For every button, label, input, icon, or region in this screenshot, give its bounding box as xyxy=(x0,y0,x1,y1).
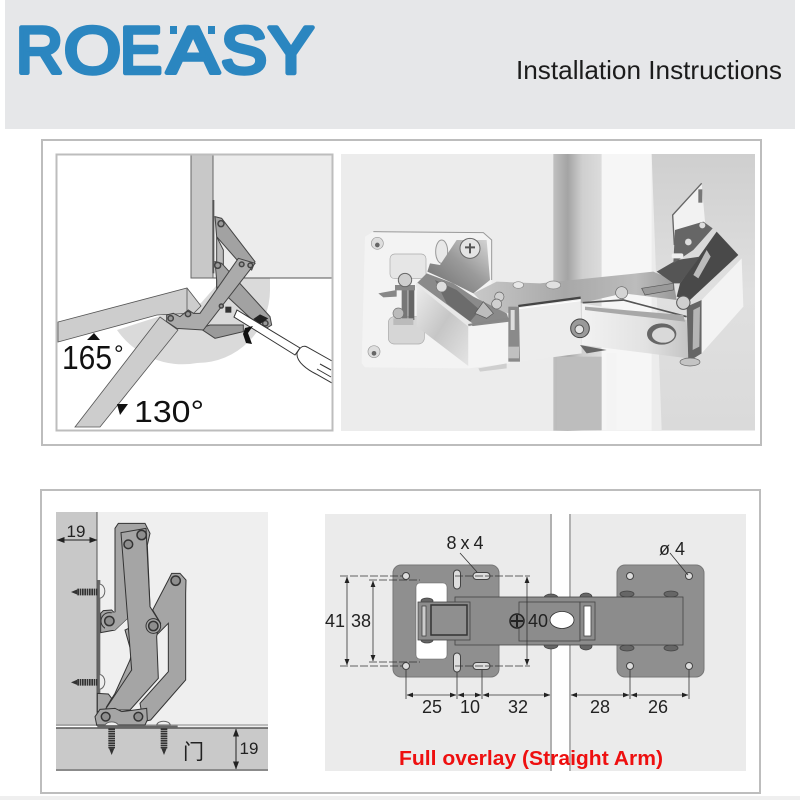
dark arm xyxy=(677,232,738,300)
label: 130 degrees: 130° xyxy=(134,394,204,429)
diagram: drilling dimensions xyxy=(325,514,746,771)
diagram: 165 and 130 degree opening xyxy=(56,154,332,430)
left plate xyxy=(393,565,499,677)
rotation arrow xyxy=(243,326,253,344)
link rod xyxy=(642,283,673,295)
logo xyxy=(16,13,314,87)
photo: mounted hinge xyxy=(341,154,755,431)
knuckle xyxy=(508,307,520,362)
dark plate section xyxy=(427,240,490,293)
logo: E xyxy=(120,13,162,87)
screws xyxy=(71,584,170,755)
dark chrome on cup top xyxy=(417,273,510,327)
hinge arm xyxy=(418,591,683,651)
right plate xyxy=(673,183,705,250)
adjusting nut xyxy=(571,319,589,338)
dimension labels: 25 xyxy=(422,697,442,717)
header band xyxy=(5,0,795,129)
diagram: hinge side section xyxy=(56,512,268,771)
door panel lower xyxy=(75,317,178,427)
logo: O xyxy=(64,13,121,87)
hinge arms xyxy=(167,200,272,338)
hinge links xyxy=(95,523,186,728)
logo: A xyxy=(167,13,219,87)
dimension labels xyxy=(325,533,685,717)
dimension labels: 26 xyxy=(648,697,668,717)
logo: Y xyxy=(268,13,314,87)
right box xyxy=(582,303,688,358)
dimension: door 19: 19 xyxy=(240,739,258,758)
label: 165 degrees: 165 xyxy=(62,339,112,376)
far right wing xyxy=(702,258,743,353)
cup box front xyxy=(468,322,510,368)
center box xyxy=(519,298,582,362)
middle top metal xyxy=(473,272,677,313)
dimension labels: 40 xyxy=(528,611,548,631)
dimension labels: ø 4 xyxy=(659,539,685,559)
logo: R xyxy=(16,13,63,87)
dimension lines xyxy=(340,553,689,699)
panel: opening angle and photo xyxy=(42,140,761,445)
caption: full overlay: Full overlay (Straight Arm) xyxy=(399,748,663,770)
adjusting screw xyxy=(402,283,408,320)
dimension labels: 32 xyxy=(508,697,528,717)
dimension labels: 38 xyxy=(351,611,371,631)
dimension labels: 10 xyxy=(460,697,480,717)
side stem xyxy=(687,300,702,362)
dimension: top 19: 19 xyxy=(67,522,85,541)
heading: installation instructions: Installation Instructions xyxy=(516,55,782,85)
dimension labels: 8 x 4 xyxy=(446,533,484,553)
label: 165 degrees: ° xyxy=(114,341,124,368)
dimension labels: 28 xyxy=(590,697,610,717)
logo: S xyxy=(221,13,267,87)
door xyxy=(58,288,201,342)
dimension: top 19 xyxy=(57,522,97,541)
cup box side xyxy=(417,285,468,366)
screwdriver xyxy=(234,310,332,383)
dimension: door 19 xyxy=(236,729,258,769)
right plate xyxy=(617,565,704,677)
panel: dimensions xyxy=(41,490,760,793)
dimension labels: 41 xyxy=(325,611,345,631)
hinge plate xyxy=(362,232,492,368)
door label: 门 xyxy=(183,741,204,764)
